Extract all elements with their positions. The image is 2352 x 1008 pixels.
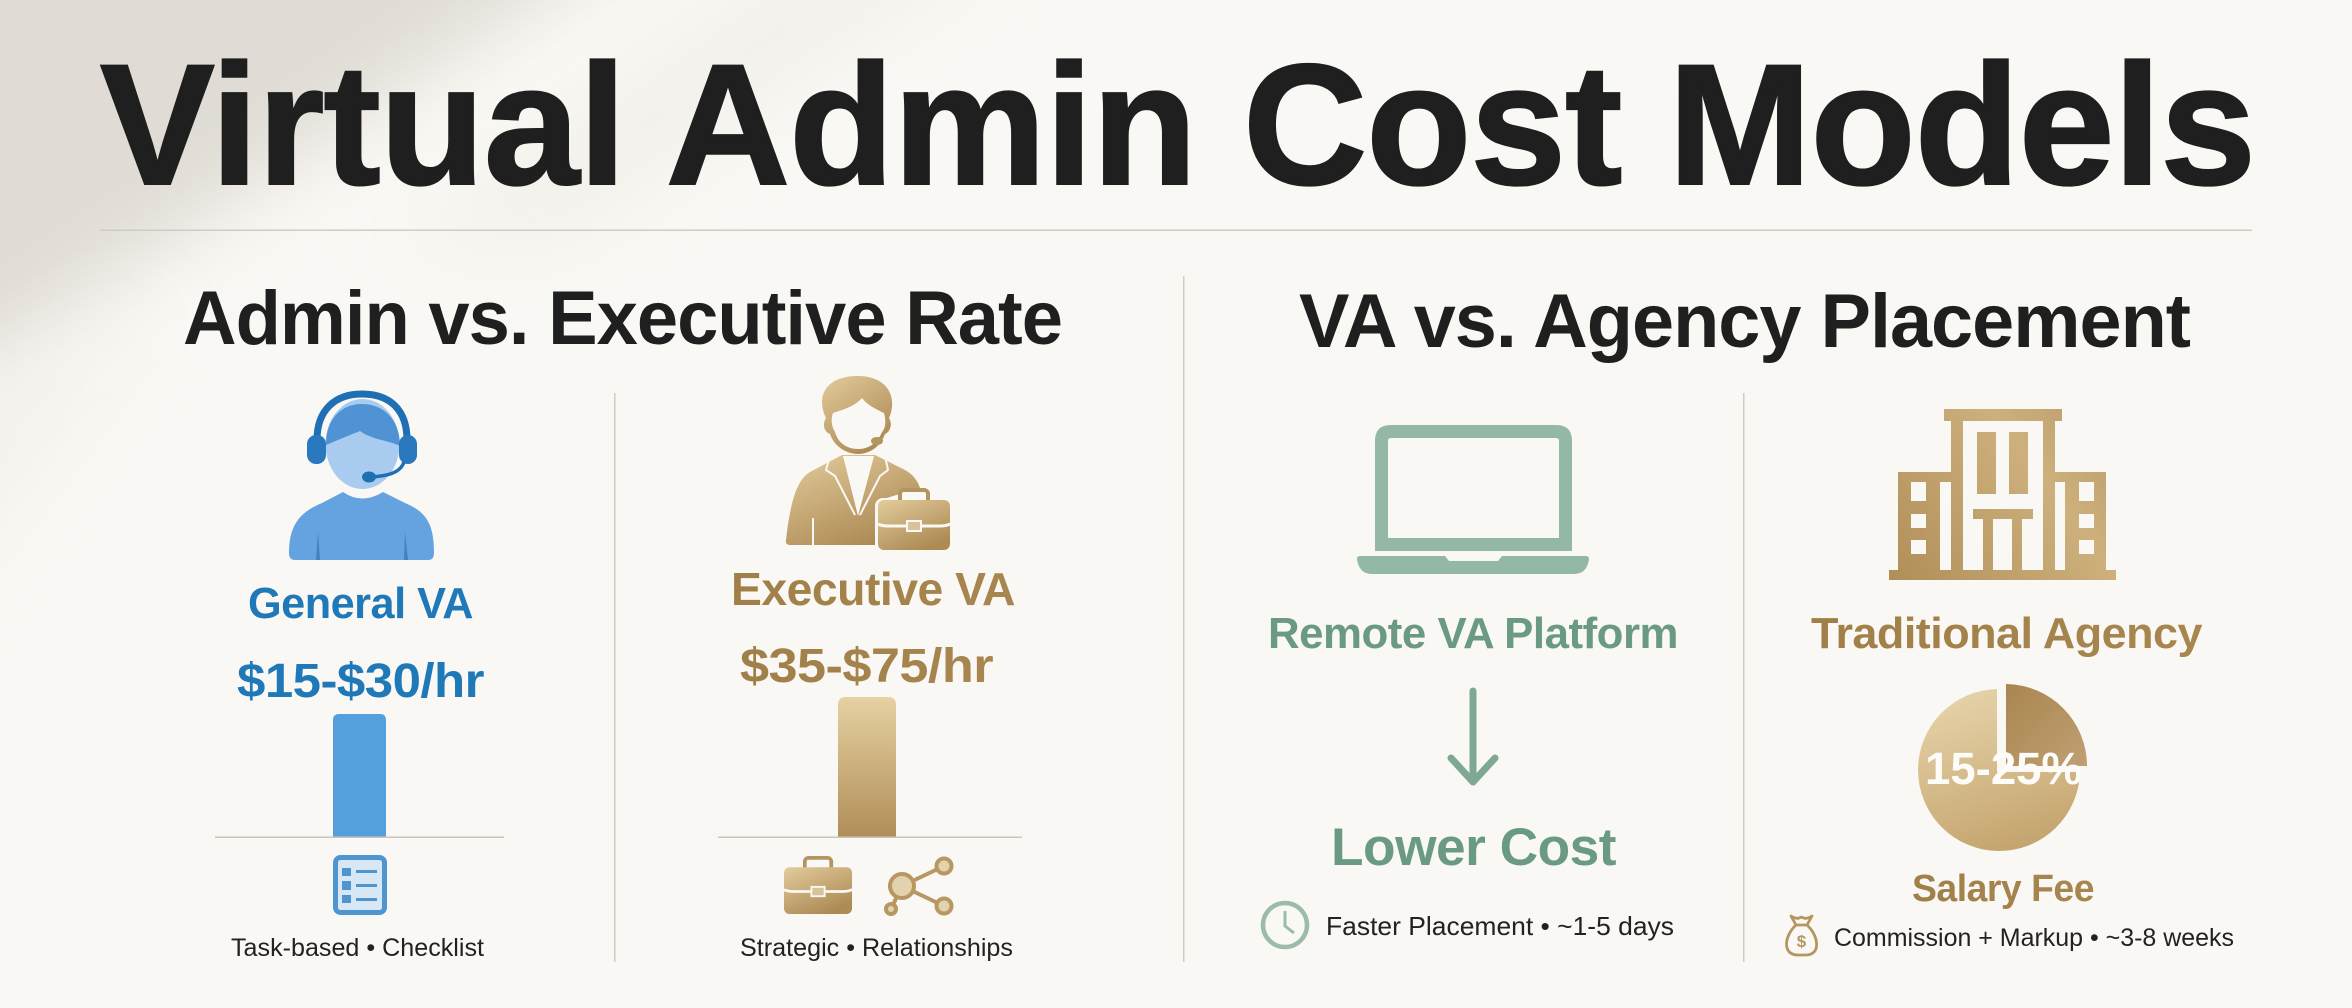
arrow: down — [1451, 691, 1495, 782]
title: Virtual Admin Cost Models — [100, 29, 2255, 221]
bar chart: executive rate — [718, 697, 1022, 838]
section: Admin vs. Executive Rate — [183, 276, 1062, 962]
icon: network — [886, 858, 952, 914]
rate: $35-$75/hr: $35-$75/hr — [740, 640, 993, 693]
icon: checklist — [336, 858, 384, 912]
label: Traditional Agency: Traditional Agency — [1811, 609, 2203, 658]
pie chart: 15-25% salary fee: 15-25% — [1925, 743, 2082, 794]
label: Executive VA: Executive VA — [731, 563, 1015, 615]
label: General VA: General VA — [248, 579, 473, 628]
caption: Task-based, Checklist: Task-based • Checklist — [231, 934, 484, 962]
caption: Commission + Markup, ~3-8 weeks: Commission + Markup • ~3-8 weeks — [1834, 924, 2234, 952]
rate: $15-$30/hr: $15-$30/hr — [237, 655, 484, 708]
label: Lower Cost: Lower Cost — [1331, 818, 1616, 877]
section: VA vs. Agency Placement — [1263, 279, 2234, 955]
icon: laptop — [1357, 425, 1589, 574]
icon: money bag: $ — [1797, 932, 1807, 951]
icon: clock — [1263, 903, 1307, 947]
heading: VA vs. Agency Placement: VA vs. Agency Placement — [1299, 279, 2191, 364]
panel: Traditional Agency — [1786, 409, 2234, 955]
label: Salary Fee: Salary Fee — [1912, 868, 2094, 910]
icon: briefcase — [784, 858, 852, 914]
label: Remote VA Platform: Remote VA Platform — [1268, 609, 1678, 658]
panel: General VA — [215, 394, 504, 962]
icon: agent with headset — [289, 394, 434, 560]
icon: executive with briefcase — [786, 376, 953, 553]
caption: Faster Placement, ~1-5 days: Faster Placement • ~1-5 days — [1326, 911, 1674, 941]
panel: Remote VA Platform — [1263, 425, 1678, 947]
pie chart: 15-25% salary fee — [1918, 684, 2087, 851]
icon: building — [1889, 409, 2116, 580]
icon: money bag — [1786, 916, 1817, 955]
bar chart: general rate — [215, 714, 504, 838]
panel: Executive VA — [718, 376, 1022, 962]
heading: Admin vs. Executive Rate: Admin vs. Executive Rate — [183, 276, 1062, 361]
caption: Strategic, Relationships: Strategic • Relationships — [740, 934, 1013, 962]
